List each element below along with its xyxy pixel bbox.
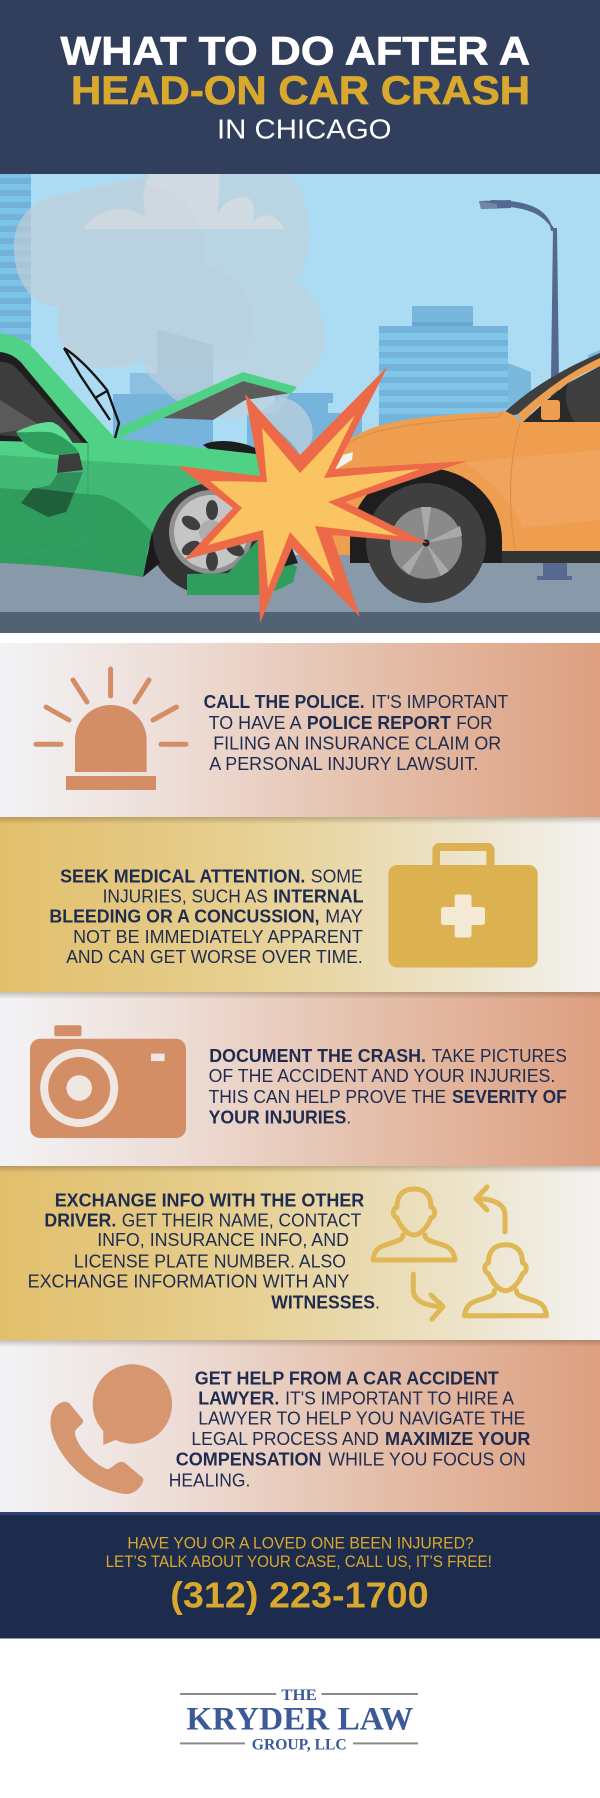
smoke inner darker lobes bbox=[14, 182, 252, 363]
hero illustration: head-on car crash bbox=[0, 135, 600, 633]
icon: camera bbox=[30, 1025, 186, 1138]
text: document the crash: DOCUMENT THE CRASH. bbox=[209, 1046, 426, 1066]
text: get help from a lawyer: COMPENSATION bbox=[176, 1450, 322, 1470]
text: get help from a lawyer bbox=[169, 1369, 530, 1491]
right striped building bbox=[379, 306, 600, 426]
green body bbox=[0, 333, 265, 577]
text: get help from a lawyer: MAXIMIZE YOUR bbox=[385, 1429, 530, 1449]
smoke wisp near crash bbox=[262, 397, 313, 455]
text: exchange info: GET THEIR NAME, CONTACT bbox=[122, 1210, 361, 1230]
text: exchange info: . bbox=[375, 1292, 380, 1312]
engine bay bbox=[203, 441, 256, 454]
text: get help from a lawyer: HEALING. bbox=[169, 1471, 250, 1491]
icon: phone and speech bubble bbox=[50, 1364, 172, 1494]
phone number: (312) 223-1700 bbox=[170, 1574, 429, 1616]
lamp base bbox=[537, 563, 572, 580]
text: document the crash: TAKE PICTURES bbox=[432, 1046, 567, 1066]
cloud bbox=[84, 174, 285, 229]
text: seek medical attention bbox=[49, 866, 364, 967]
front bumper bbox=[187, 540, 297, 595]
arrow down-right bbox=[413, 1274, 443, 1319]
green car bbox=[0, 333, 298, 595]
text: document the crash: THIS CAN HELP PROVE THE bbox=[209, 1087, 446, 1107]
header banner bbox=[0, 0, 600, 174]
text: get help from a lawyer: LEGAL PROCESS AND bbox=[191, 1429, 379, 1449]
green car tyre and rim bbox=[149, 484, 258, 590]
text: seek medical attention: INJURIES, SUCH AS bbox=[103, 886, 268, 906]
windscreen bbox=[0, 352, 88, 443]
wheel arch bbox=[350, 468, 502, 563]
text: seek medical attention: MAY bbox=[325, 906, 363, 926]
text: seek medical attention: SEEK MEDICAL ATTENTION. bbox=[60, 866, 305, 886]
text: document the crash: . bbox=[346, 1108, 351, 1128]
text: document the crash: YOUR INJURIES bbox=[209, 1108, 346, 1128]
smoke plume bbox=[14, 174, 325, 418]
panel: document the crash bbox=[0, 992, 600, 1166]
title line 2: HEAD-ON CAR CRASH bbox=[71, 69, 530, 113]
call to action text bbox=[106, 1534, 492, 1571]
panel: get help from a lawyer bbox=[0, 1340, 600, 1512]
text: get help from a lawyer: IT'S IMPORTANT TO HIRE A bbox=[285, 1388, 514, 1408]
text: document the crash: OF THE ACCIDENT AND YOUR INJURIES. bbox=[209, 1066, 555, 1086]
text: document the crash: SEVERITY OF bbox=[452, 1087, 567, 1107]
text: exchange info bbox=[28, 1190, 380, 1312]
call to action text: HAVE YOU OR A LOVED ONE BEEN INJURED? bbox=[127, 1534, 474, 1552]
text: seek medical attention: SOME bbox=[311, 866, 363, 886]
wiper bbox=[64, 348, 119, 438]
icon: siren bbox=[36, 669, 186, 790]
text: call the police: A PERSONAL INJURY LAWSUIT. bbox=[209, 754, 478, 774]
person one bbox=[373, 1189, 455, 1260]
roof and window bbox=[505, 353, 600, 422]
left striped building bbox=[0, 174, 31, 354]
person two bbox=[464, 1245, 546, 1316]
text: document the crash bbox=[209, 1046, 567, 1128]
text: seek medical attention: AND CAN GET WORSE OVER TIME. bbox=[66, 947, 363, 967]
text: call the police: FOR bbox=[456, 713, 492, 733]
road bbox=[0, 555, 600, 612]
text: call the police: FILING AN INSURANCE CLAIM OR bbox=[213, 734, 501, 754]
street lamp bbox=[479, 200, 559, 397]
icon: two people exchanging info bbox=[373, 1187, 546, 1319]
subtitle: IN CHICAGO bbox=[217, 114, 392, 144]
side mirror bbox=[16, 422, 83, 517]
panel: seek medical attention bbox=[0, 817, 600, 992]
orange body bbox=[320, 411, 600, 555]
text: seek medical attention: NOT BE IMMEDIATELY APPARENT bbox=[73, 927, 363, 947]
text: call the police: CALL THE POLICE. bbox=[204, 692, 365, 712]
arrow up-left bbox=[476, 1187, 505, 1232]
logo: the kryder law group: THE bbox=[281, 1687, 317, 1704]
background buildings centre bbox=[113, 329, 362, 455]
text: exchange info: EXCHANGE INFO WITH THE OTHER bbox=[55, 1190, 364, 1210]
impact star bbox=[178, 366, 467, 623]
logo: the kryder law group: GROUP, LLC bbox=[252, 1736, 347, 1754]
text: exchange info: WITNESSES bbox=[271, 1292, 375, 1312]
open hood bbox=[116, 372, 297, 440]
text: get help from a lawyer: LAWYER. bbox=[198, 1388, 279, 1408]
call to action footer bbox=[0, 1512, 600, 1638]
wheel arch wedge bbox=[143, 532, 160, 577]
text: get help from a lawyer: WHILE YOU FOCUS ON bbox=[328, 1450, 526, 1470]
panel: exchange info bbox=[0, 1166, 600, 1340]
text: exchange info: LICENSE PLATE NUMBER. ALSO bbox=[74, 1251, 346, 1271]
title line 1: WHAT TO DO AFTER A bbox=[60, 30, 530, 74]
text: seek medical attention: BLEEDING OR A CONCUSSION, bbox=[49, 906, 320, 926]
call to action text: LET’S TALK ABOUT YOUR CASE, CALL US, IT’S FREE! bbox=[106, 1552, 492, 1571]
icon: first aid kit bbox=[388, 843, 538, 968]
text: exchange info: EXCHANGE INFORMATION WITH ANY bbox=[28, 1271, 349, 1291]
lighter panel bbox=[465, 450, 600, 528]
logo: the kryder law group bbox=[180, 1687, 418, 1754]
headlight bbox=[335, 452, 353, 470]
panel: call the police bbox=[0, 643, 600, 817]
text: call the police: POLICE REPORT bbox=[307, 713, 451, 733]
text: get help from a lawyer: GET HELP FROM A CAR ACCIDENT bbox=[195, 1369, 499, 1389]
orange car tyre bbox=[366, 483, 486, 603]
text: exchange info: DRIVER. bbox=[44, 1210, 116, 1230]
orange car rim bbox=[390, 507, 462, 579]
text: seek medical attention: INTERNAL bbox=[273, 886, 364, 906]
text: exchange info: INFO, INSURANCE INFO, AND bbox=[97, 1230, 349, 1250]
orange car bbox=[320, 353, 600, 603]
road dark strip bbox=[0, 612, 600, 633]
underside bbox=[500, 551, 600, 563]
text: call the police: IT'S IMPORTANT bbox=[371, 692, 508, 712]
logo: the kryder law group: KRYDER LAW bbox=[186, 1702, 413, 1738]
door line bbox=[0, 443, 88, 555]
text: call the police: TO HAVE A bbox=[209, 713, 302, 733]
text: get help from a lawyer: LAWYER TO HELP YOU NAVIGATE THE bbox=[198, 1408, 525, 1428]
body crease lines bbox=[343, 412, 520, 550]
text: call the police bbox=[204, 692, 508, 774]
